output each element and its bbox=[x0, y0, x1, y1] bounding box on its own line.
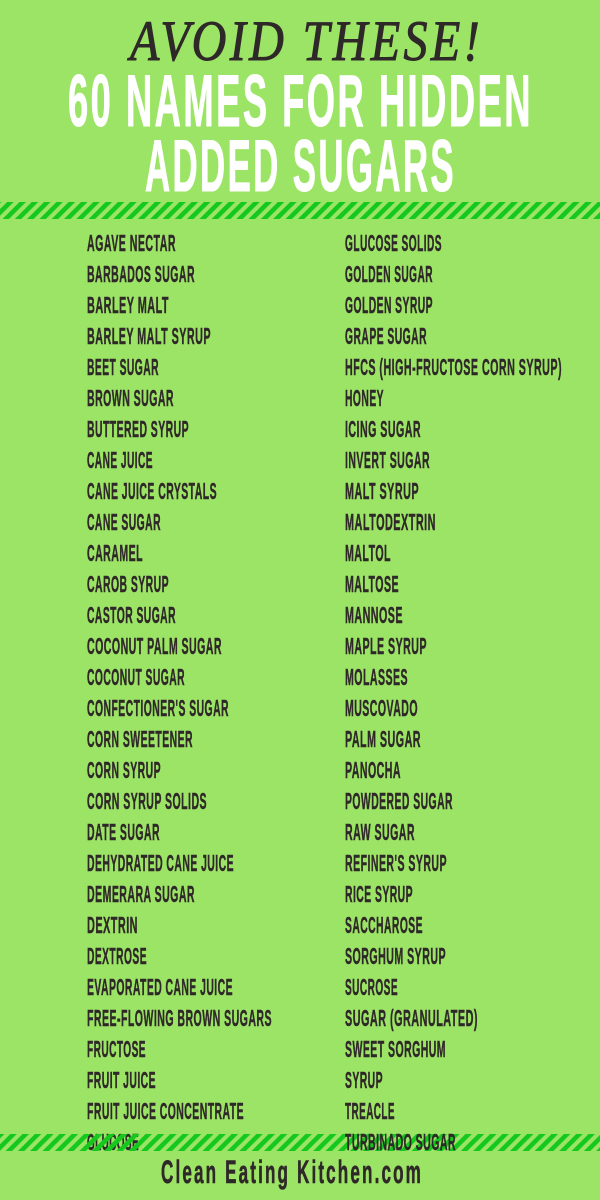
list: right column: MUSCOVADO bbox=[345, 695, 418, 721]
list: right column: REFINER'S SYRUP bbox=[345, 850, 447, 876]
list: right column: TURBINADO SUGAR bbox=[345, 1129, 456, 1155]
list: right column: ICING SUGAR bbox=[345, 416, 421, 442]
list: left column: CANE JUICE bbox=[87, 447, 153, 473]
list: right column: PANOCHA bbox=[345, 757, 401, 783]
list: right column: GLUCOSE SOLIDS bbox=[345, 230, 442, 256]
list: right column: SYRUP bbox=[345, 1067, 383, 1093]
list: right column: INVERT SUGAR bbox=[345, 447, 430, 473]
list: right column: SWEET SORGHUM bbox=[345, 1036, 446, 1062]
list: left column: BROWN SUGAR bbox=[87, 385, 174, 411]
list: right column: SORGHUM SYRUP bbox=[345, 943, 446, 969]
list: left column: DEMERARA SUGAR bbox=[87, 881, 195, 907]
list: left column bbox=[87, 230, 272, 1155]
list: left column: FRUCTOSE bbox=[87, 1036, 146, 1062]
list: right column: MAPLE SYRUP bbox=[345, 633, 427, 659]
list: left column: AGAVE NECTAR bbox=[87, 230, 176, 256]
list: left column: GLUCOSE bbox=[87, 1129, 139, 1155]
list: right column: GOLDEN SUGAR bbox=[345, 261, 433, 287]
list: left column: DEXTROSE bbox=[87, 943, 147, 969]
list: right column: HONEY bbox=[345, 385, 384, 411]
list: left column: CANE JUICE CRYSTALS bbox=[87, 478, 217, 504]
list: left column: BARBADOS SUGAR bbox=[87, 261, 195, 287]
list: left column: CANE SUGAR bbox=[87, 509, 161, 535]
list: left column: BEET SUGAR bbox=[87, 354, 159, 380]
list: left column: CASTOR SUGAR bbox=[87, 602, 176, 628]
list: right column: GRAPE SUGAR bbox=[345, 323, 427, 349]
list: left column: COCONUT PALM SUGAR bbox=[87, 633, 222, 659]
list: right column: POWDERED SUGAR bbox=[345, 788, 453, 814]
list: left column: CONFECTIONER'S SUGAR bbox=[87, 695, 229, 721]
list: left column: EVAPORATED CANE JUICE bbox=[87, 974, 233, 1000]
list: right column: SACCHAROSE bbox=[345, 912, 423, 938]
list: left column: DATE SUGAR bbox=[87, 819, 160, 845]
list: right column: MALTOL bbox=[345, 540, 391, 566]
list: right column: MALTODEXTRIN bbox=[345, 509, 436, 535]
list: left column: CARAMEL bbox=[87, 540, 143, 566]
heading: avoid these: AVOID THESE! bbox=[127, 10, 483, 73]
list: left column: FRUIT JUICE bbox=[87, 1067, 156, 1093]
divider: bottom striped band bbox=[0, 1134, 600, 1151]
list: right column: SUCROSE bbox=[345, 974, 398, 1000]
list: right column: RICE SYRUP bbox=[345, 881, 413, 907]
list: left column: FRUIT JUICE CONCENTRATE bbox=[87, 1098, 244, 1124]
list: right column: TREACLE bbox=[345, 1098, 395, 1124]
list: left column: DEXTRIN bbox=[87, 912, 138, 938]
list: left column: BARLEY MALT SYRUP bbox=[87, 323, 211, 349]
text: FREE-FLOWING BROWN SUGARS bbox=[87, 1005, 272, 1031]
list: left column: CORN SWEETENER bbox=[87, 726, 193, 752]
list: left column: BARLEY MALT bbox=[87, 292, 169, 318]
divider: top striped band bbox=[0, 202, 600, 219]
list: right column: MOLASSES bbox=[345, 664, 408, 690]
list: left column: CORN SYRUP bbox=[87, 757, 161, 783]
list: right column: MALTOSE bbox=[345, 571, 399, 597]
list: left column: CORN SYRUP SOLIDS bbox=[87, 788, 207, 814]
list: right column: RAW SUGAR bbox=[345, 819, 415, 845]
list: left column: DEHYDRATED CANE JUICE bbox=[87, 850, 234, 876]
list: right column: GOLDEN SYRUP bbox=[345, 292, 433, 318]
list: right column: PALM SUGAR bbox=[345, 726, 421, 752]
list: right column: MALT SYRUP bbox=[345, 478, 419, 504]
list: right column bbox=[345, 230, 562, 1155]
list: left column: COCONUT SUGAR bbox=[87, 664, 185, 690]
list: left column: CAROB SYRUP bbox=[87, 571, 169, 597]
list: left column: BUTTERED SYRUP bbox=[87, 416, 189, 442]
list: right column: MANNOSE bbox=[345, 602, 403, 628]
